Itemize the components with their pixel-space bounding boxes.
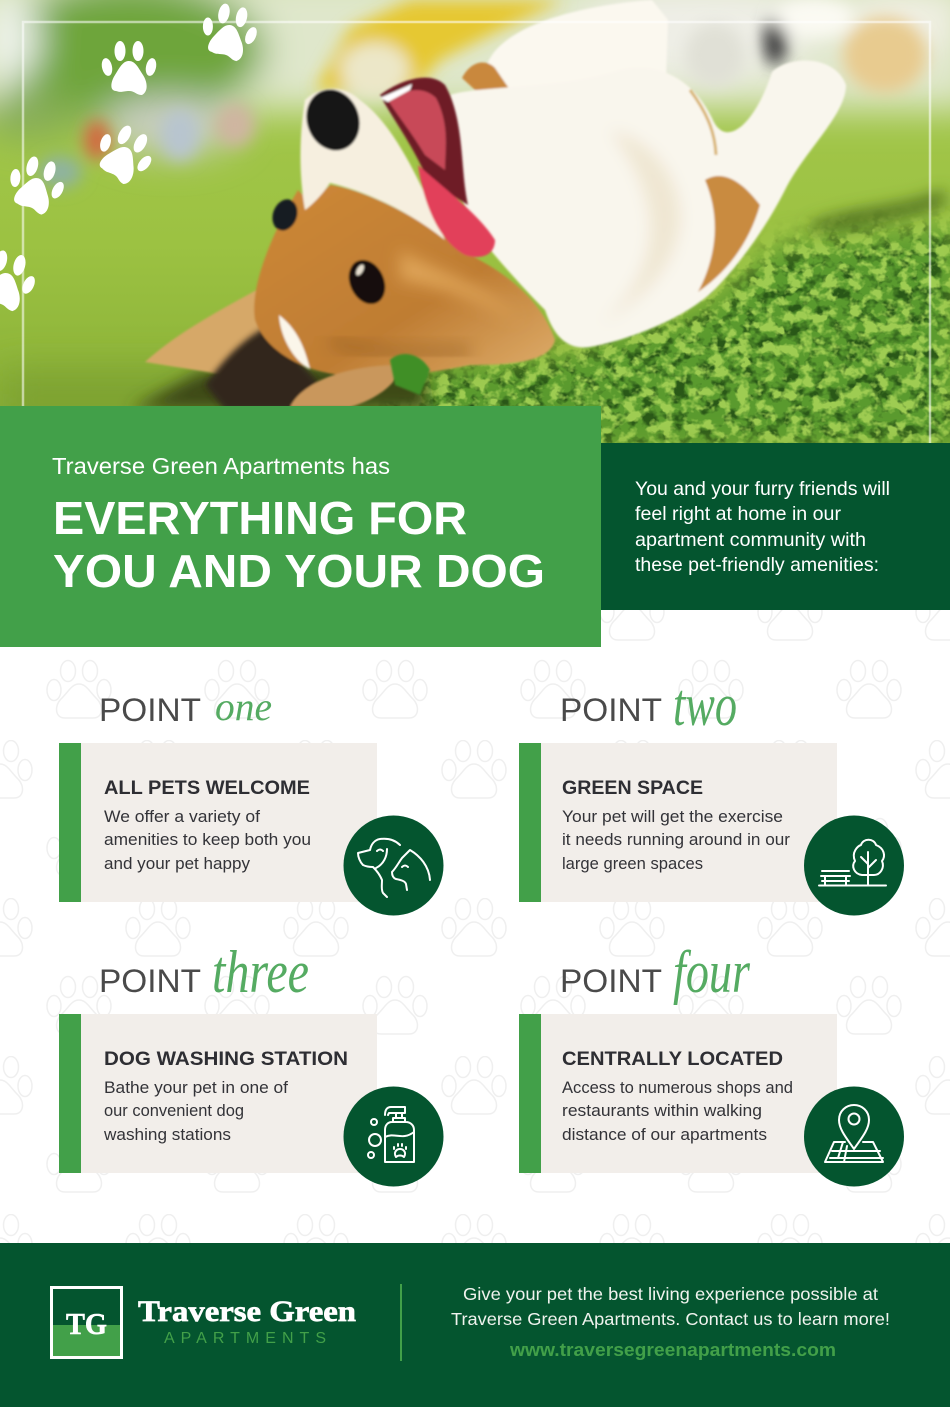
call to action text: Traverse Green Apartments. Contact us to learn more! <box>451 1309 890 1329</box>
point three heading <box>99 939 309 1005</box>
point three card: DOG WASHING STATION <box>104 1048 348 1070</box>
point four heading <box>560 939 750 1005</box>
point one card: ALL PETS WELCOME <box>104 777 310 799</box>
grass foreground texture <box>386 211 950 443</box>
dog body <box>450 0 846 348</box>
point two heading <box>560 672 737 738</box>
point two card <box>519 743 837 902</box>
website url: www.traversegreenapartments.com <box>509 1340 836 1360</box>
point four heading: POINT <box>560 963 662 999</box>
point one heading: one <box>215 684 272 729</box>
point one card <box>59 743 377 902</box>
intro paragraph: these pet-friendly amenities: <box>635 554 879 576</box>
footer divider <box>400 1284 402 1361</box>
shadow under dog head <box>130 366 438 406</box>
frame line on photo <box>23 22 930 443</box>
point two heading: two <box>673 672 737 738</box>
main heading: EVERYTHING FOR <box>53 492 467 544</box>
point four card: Access to numerous shops and <box>562 1078 793 1097</box>
point two card: GREEN SPACE <box>562 777 703 799</box>
logo wordmark: Traverse Green <box>138 1295 356 1328</box>
point four card: restaurants within walking <box>562 1101 762 1120</box>
icon: shampoo bottle with bubbles <box>344 1086 444 1186</box>
point three <box>59 939 444 1186</box>
icon: tree and bench <box>804 816 904 916</box>
main heading <box>53 492 545 597</box>
hero photo: corgi rolling on grass <box>0 0 950 443</box>
intro paragraph: apartment community with <box>635 529 866 551</box>
logo wordmark <box>138 1295 356 1347</box>
point three card: Bathe your pet in one of <box>104 1078 288 1097</box>
intro paragraph: feel right at home in our <box>635 503 841 525</box>
panel: dark green intro block <box>601 443 950 610</box>
point one heading: POINT <box>99 692 201 728</box>
point two <box>519 672 904 916</box>
logo mark <box>52 1288 122 1358</box>
intro paragraph <box>635 478 890 576</box>
point one card: We offer a variety of <box>104 807 260 826</box>
point two card: it needs running around in our <box>562 830 790 849</box>
point three heading: POINT <box>99 963 201 999</box>
point three card: washing stations <box>103 1125 231 1144</box>
dog head <box>145 78 555 410</box>
point four card: CENTRALLY LOCATED <box>562 1048 783 1070</box>
point two card: large green spaces <box>562 854 703 873</box>
point four heading: four <box>673 939 750 1005</box>
point one heading <box>99 684 272 729</box>
point two heading: POINT <box>560 692 662 728</box>
intro line: Traverse Green Apartments has <box>52 453 390 479</box>
point three card <box>59 1014 377 1173</box>
call to action text: Give your pet the best living experience possible at <box>463 1284 878 1304</box>
logo mark: TG <box>66 1306 107 1341</box>
point four card <box>519 1014 837 1173</box>
paw print background pattern <box>0 600 950 1250</box>
footer band <box>0 1243 950 1407</box>
call to action text <box>451 1284 890 1329</box>
point one <box>59 684 444 916</box>
point one card: amenities to keep both you <box>104 830 311 849</box>
intro paragraph: You and your furry friends will <box>635 478 890 500</box>
point two card: Your pet will get the exercise <box>562 807 783 826</box>
point four card: distance of our apartments <box>562 1125 767 1144</box>
point three card: our convenient dog <box>104 1101 244 1120</box>
point three heading: three <box>212 939 309 1005</box>
white paw prints on photo <box>0 0 263 315</box>
point one card: and your pet happy <box>104 854 250 873</box>
icon: location pin on map <box>804 1086 904 1186</box>
panel: green title block <box>0 406 601 647</box>
main heading: YOU AND YOUR DOG <box>53 545 545 597</box>
icon: dog and cat <box>344 816 444 916</box>
logo wordmark: APARTMENTS <box>164 1330 326 1347</box>
point four <box>519 939 904 1186</box>
